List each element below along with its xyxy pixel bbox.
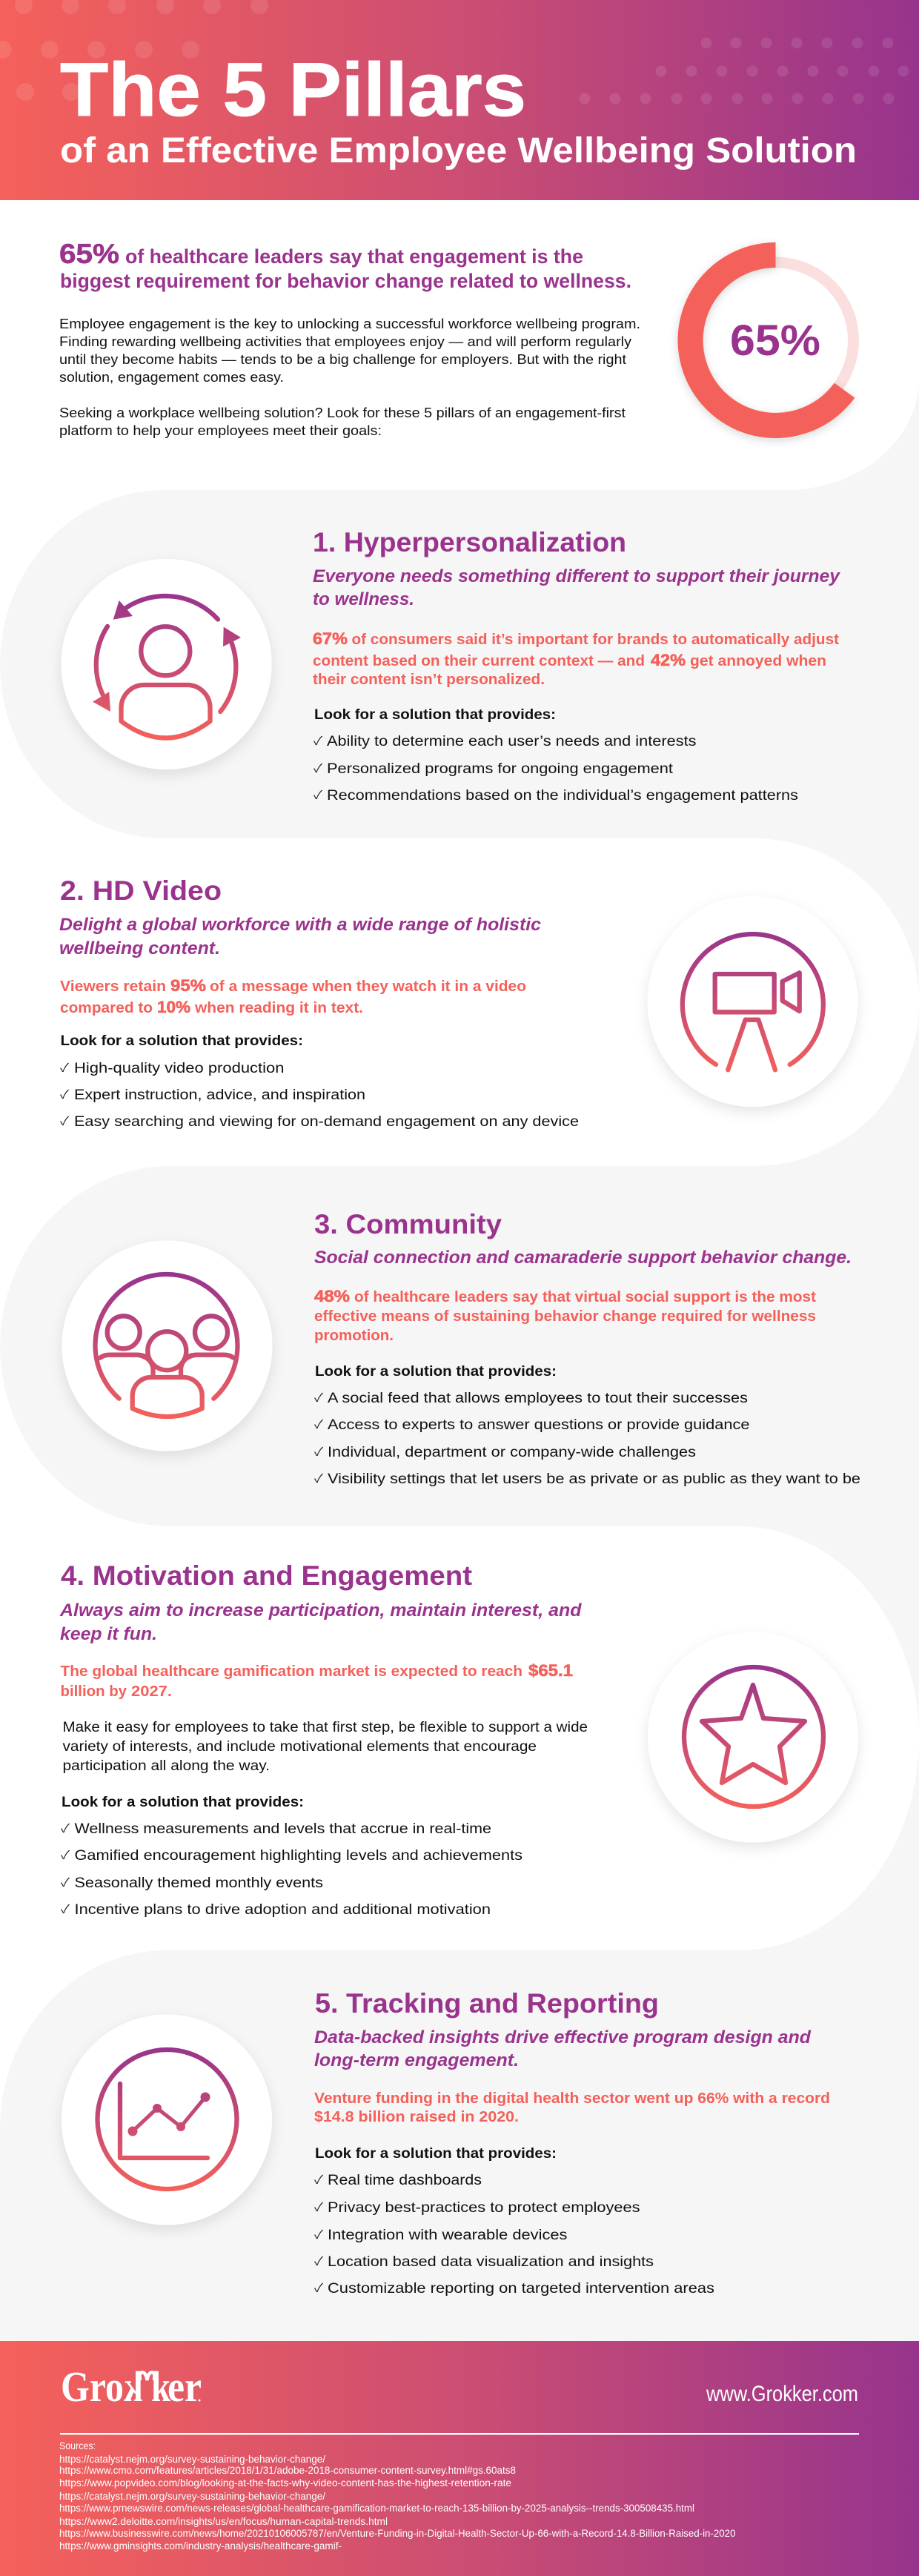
- icon: video camera on tripod: [648, 896, 858, 1107]
- logo: Grokker: [61, 2363, 202, 2411]
- heading: 2. HD Video: [60, 875, 222, 906]
- checklist: [60, 1033, 579, 1130]
- intro body text: solution, engagement comes easy.: [59, 369, 284, 385]
- panel: pillar 5 tracking and reporting: [0, 1950, 919, 2341]
- title: The 5 Pillars: [60, 47, 526, 132]
- tagline: long-term engagement.: [314, 2050, 519, 2070]
- body text: [62, 1720, 588, 1774]
- checklist: [61, 1795, 522, 1918]
- tagline: wellbeing content.: [59, 938, 220, 958]
- statistic: billion by: [61, 1683, 127, 1700]
- tagline: Always aim to increase participation, maintain interest, and: [59, 1600, 583, 1620]
- sources: Sources:: [59, 2440, 96, 2451]
- header banner: [0, 0, 919, 200]
- tagline: Social connection and camaraderie support behavior change.: [314, 1248, 852, 1268]
- checklist: ✓: [314, 2278, 323, 2296]
- statistic: content based on their current context — and: [313, 652, 645, 669]
- statistic: 10%: [157, 998, 190, 1016]
- statistic: of consumers said it’s important for brands to automatically adjust: [351, 631, 839, 648]
- intro body text: Finding rewarding wellbeing activities that employees enjoy — and will perform regularly: [59, 334, 632, 349]
- statistic: their content isn’t personalized.: [313, 671, 545, 688]
- panel: intro: [0, 200, 919, 490]
- heading: 1. Hyperpersonalization: [313, 527, 626, 557]
- checklist: Location based data visualization and insights: [328, 2254, 654, 2270]
- statistic: 95%: [170, 976, 206, 995]
- checklist: ✓: [314, 1442, 323, 1460]
- body text: variety of interests, and include motivational elements that encourage: [62, 1739, 537, 1755]
- checklist: [313, 707, 798, 804]
- statistic: Venture funding in the digital health sector went up 66% with a record: [314, 2090, 830, 2107]
- donut chart: 65%: [678, 242, 855, 438]
- logo: Grokker: k: [151, 2363, 171, 2411]
- checklist: A social feed that allows employees to tout their successes: [328, 1391, 748, 1406]
- tagline: Delight a global workforce with a wide range of holistic: [59, 915, 541, 935]
- checklist: Look for a solution that provides:: [315, 1364, 557, 1380]
- tagline: Data-backed insights drive effective program design and: [314, 2027, 812, 2047]
- logo: Grokker: er: [167, 2363, 202, 2411]
- checklist: Recommendations based on the individual’s engagement patterns: [327, 788, 798, 804]
- statistic: compared to: [60, 999, 153, 1016]
- heading: 4. Motivation and Engagement: [61, 1560, 472, 1591]
- statistic: 48%: [314, 1287, 350, 1305]
- sources: https://www.cmo.com/features/articles/2018/1/31/adobe-2018-consumer-content-survey.html#gs.60ats8: [59, 2465, 516, 2476]
- tagline: to wellness.: [313, 589, 414, 609]
- statistic: The global healthcare gamification market is expected to reach: [61, 1663, 522, 1680]
- icon: group of three people: [62, 1241, 273, 1451]
- statistic: of healthcare leaders say that virtual social support is the most: [354, 1288, 816, 1305]
- checklist: Look for a solution that provides:: [61, 1033, 303, 1049]
- statistic: $65.1: [528, 1661, 573, 1680]
- statistic: [314, 2090, 830, 2125]
- intro body text: Seeking a workplace wellbeing solution? Look for these 5 pillars of an engagement-first: [59, 405, 626, 420]
- statistic: 2027.: [131, 1683, 172, 1700]
- panel: pillar 3 community: [0, 1166, 919, 1526]
- tagline: Everyone needs something different to support their journey: [313, 566, 841, 586]
- panel: pillar 2 hd video: [0, 838, 919, 1166]
- heading: 5. Tracking and Reporting: [315, 1988, 659, 2019]
- checklist: Ability to determine each user’s needs and interests: [327, 734, 697, 749]
- checklist: Individual, department or company-wide challenges: [328, 1445, 696, 1460]
- website url: www.Grokker.com: [706, 2382, 858, 2406]
- panel: pillar 4 motivation and engagement: [0, 1526, 919, 1950]
- checklist: Integration with wearable devices: [328, 2228, 568, 2243]
- statistic: get annoyed when: [690, 652, 826, 669]
- checklist: ✓: [314, 1388, 323, 1405]
- checklist: ✓: [314, 2225, 323, 2242]
- sources: https://www.popvideo.com/blog/looking-at-the-facts-why-video-content-has-the-highest-retention-rate: [59, 2477, 511, 2489]
- statistic: [60, 976, 526, 1016]
- checklist: ✓: [313, 731, 322, 749]
- intro body text: platform to help your employees meet their goals:: [59, 423, 382, 438]
- statistic: effective means of sustaining behavior change required for wellness: [314, 1308, 816, 1325]
- checklist: Look for a solution that provides:: [314, 707, 556, 723]
- checklist: Incentive plans to drive adoption and additional motivation: [74, 1902, 491, 1918]
- sources: https://www.gminsights.com/industry-analysis/healthcare-gamif-: [59, 2540, 342, 2552]
- sources: https://catalyst.nejm.org/survey-sustaining-behavior-change/: [59, 2454, 325, 2465]
- checklist: ✓: [314, 2170, 323, 2188]
- icon: star in ring: [648, 1632, 858, 1843]
- intro headline: of healthcare leaders say that engagement is the: [125, 245, 583, 268]
- checklist: ✓: [313, 758, 322, 776]
- statistic: of a message when they watch it in a video: [210, 978, 526, 995]
- checklist: ✓: [60, 1111, 69, 1129]
- statistic: when reading it in text.: [194, 999, 363, 1016]
- checklist: Privacy best-practices to protect employees: [328, 2200, 640, 2216]
- tagline: [59, 1600, 583, 1644]
- checklist: Wellness measurements and levels that accrue in real-time: [74, 1821, 491, 1837]
- body text: Make it easy for employees to take that first step, be flexible to support a wide: [62, 1720, 588, 1735]
- subtitle: of an Effective Employee Wellbeing Solution: [60, 131, 857, 170]
- checklist: ✓: [314, 2251, 323, 2269]
- checklist: Access to experts to answer questions or provide guidance: [328, 1417, 750, 1433]
- checklist: ✓: [314, 2197, 323, 2215]
- checklist: ✓: [61, 1845, 70, 1863]
- heading: 3. Community: [314, 1209, 502, 1239]
- sources: https://www.businesswire.com/news/home/20210106005787/en/Venture-Funding-in-Digital-Health-Sector-Up-66-with-a-Record-14.8-Billion-Raised-in-2020: [59, 2528, 735, 2539]
- statistic: promotion.: [314, 1327, 394, 1344]
- checklist: Real time dashboards: [328, 2173, 482, 2188]
- checklist: ✓: [61, 1899, 70, 1917]
- checklist: Personalized programs for ongoing engagement: [327, 761, 674, 777]
- body text: participation all along the way.: [62, 1758, 270, 1774]
- checklist: Look for a solution that provides:: [62, 1795, 304, 1810]
- tagline: [59, 915, 541, 958]
- checklist: ✓: [61, 1818, 70, 1836]
- tagline: keep it fun.: [60, 1624, 157, 1644]
- intro headline: 65%: [59, 239, 119, 269]
- statistic: 42%: [651, 651, 686, 669]
- statistic: [314, 1287, 816, 1344]
- checklist: ✓: [314, 1469, 323, 1486]
- sources: https://catalyst.nejm.org/survey-sustaining-behavior-change/: [59, 2491, 325, 2502]
- checklist: Gamified encouragement highlighting levels and achievements: [74, 1848, 522, 1864]
- checklist: ✓: [314, 1414, 323, 1432]
- checklist: Expert instruction, advice, and inspiration: [74, 1087, 365, 1103]
- checklist: High-quality video production: [74, 1061, 285, 1076]
- icon: person with cycle arrows: [61, 559, 271, 769]
- checklist: Customizable reporting on targeted intervention areas: [328, 2281, 714, 2297]
- tagline: [314, 2027, 812, 2070]
- checklist: ✓: [313, 785, 322, 803]
- checklist: ✓: [60, 1085, 69, 1102]
- checklist: Look for a solution that provides:: [315, 2146, 557, 2162]
- intro body text: [59, 316, 640, 438]
- checklist: ✓: [60, 1058, 69, 1076]
- sources: [59, 2440, 735, 2552]
- statistic: 67%: [313, 629, 348, 648]
- logo: Grokker: k: [123, 2363, 143, 2411]
- intro headline: biggest requirement for behavior change related to wellness.: [60, 270, 631, 292]
- checklist: Seasonally themed monthly events: [74, 1875, 323, 1891]
- statistic: Viewers retain: [60, 978, 166, 995]
- checklist: [314, 2146, 714, 2297]
- checklist: Easy searching and viewing for on-demand engagement on any device: [74, 1114, 579, 1130]
- footer band: [0, 2341, 919, 2576]
- sources: https://www.prnewswire.com/news-releases/global-healthcare-gamification-market-to-reach-135-billion-by-2025-analysis--trends-300508435.html: [59, 2503, 694, 2514]
- intro headline: [59, 239, 631, 292]
- statistic: [61, 1661, 573, 1700]
- donut chart: 65%: 65%: [730, 317, 820, 365]
- checklist: ✓: [61, 1873, 70, 1890]
- intro body text: until they become habits — tends to be a big challenge for employers. But with the right: [59, 351, 626, 367]
- statistic: [313, 629, 839, 688]
- intro body text: Employee engagement is the key to unlocking a successful workforce wellbeing program.: [59, 316, 640, 331]
- tagline: [313, 566, 841, 609]
- statistic: $14.8 billion raised in 2020.: [314, 2108, 519, 2125]
- logo: Grokker: Gro: [61, 2363, 124, 2411]
- checklist: Visibility settings that let users be as private or as public as they want to be: [328, 1471, 860, 1487]
- icon: line chart in ring: [62, 2015, 272, 2225]
- sources: https://www2.deloitte.com/insights/us/en/focus/human-capital-trends.html: [59, 2516, 388, 2527]
- checklist: [314, 1364, 860, 1487]
- panel: pillar 1 hyperpersonalization: [0, 490, 919, 838]
